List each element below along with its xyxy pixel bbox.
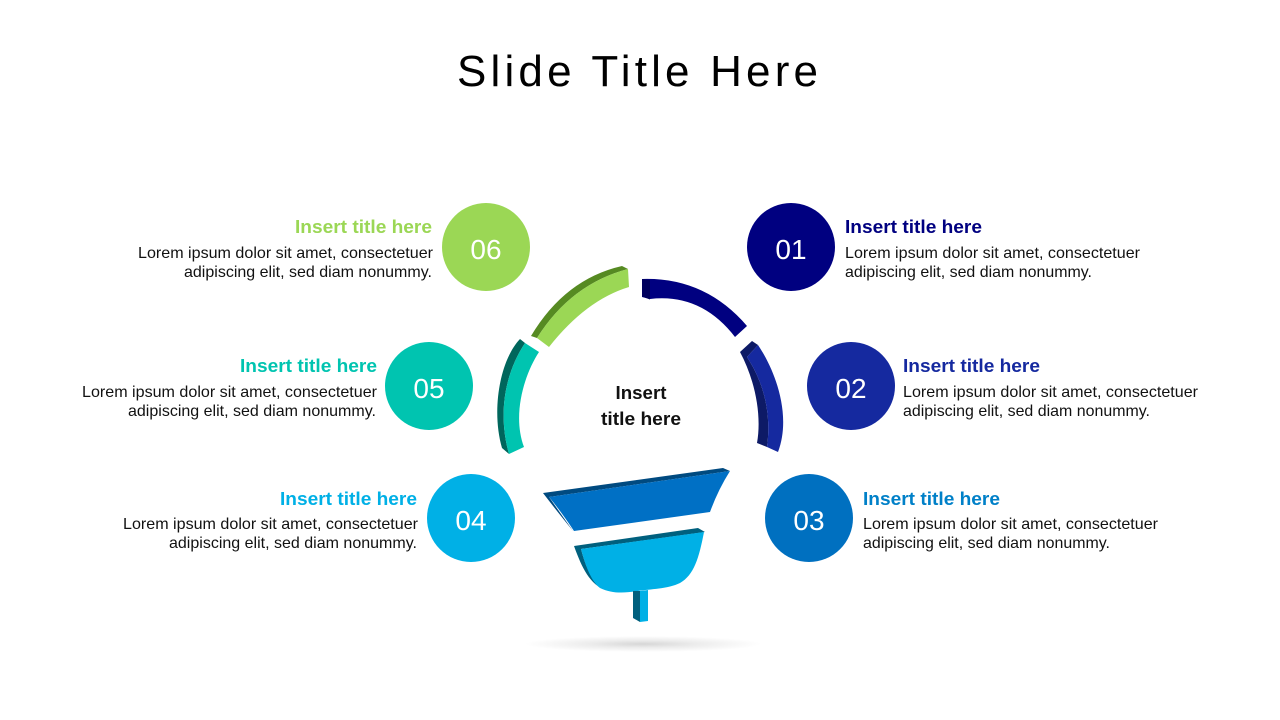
arc segment 05 xyxy=(497,339,539,454)
arc segment 01 xyxy=(642,279,747,337)
text 02: Insert title here xyxy=(903,356,1040,376)
text 03: adipiscing elit, sed diam nonummy. xyxy=(863,535,1110,552)
text 06: adipiscing elit, sed diam nonummy. xyxy=(184,264,432,281)
funnel lower section xyxy=(574,528,705,593)
arc segment 02 xyxy=(740,341,783,452)
text 05: adipiscing elit, sed diam nonummy. xyxy=(128,403,376,420)
item 06 xyxy=(138,203,530,291)
circle 04: 04 xyxy=(455,505,487,536)
text 05 xyxy=(82,356,378,420)
text 06 xyxy=(138,217,434,281)
circle 05: 05 xyxy=(413,373,445,404)
text 04 xyxy=(123,489,419,552)
text 02: adipiscing elit, sed diam nonummy. xyxy=(903,403,1150,420)
circle 02: 02 xyxy=(835,373,867,404)
center label: Insert xyxy=(616,383,666,403)
text 04: Insert title here xyxy=(280,489,417,509)
circle 02 xyxy=(807,342,895,430)
text 01: Lorem ipsum dolor sit amet, consectetuer xyxy=(845,245,1141,262)
text 01 xyxy=(845,217,1141,281)
circle 04 xyxy=(427,474,515,562)
center label: title here xyxy=(601,409,681,429)
text 01: Insert title here xyxy=(845,217,982,237)
item 03 xyxy=(765,474,1159,562)
text 02 xyxy=(903,356,1199,420)
circle 01 xyxy=(747,203,835,291)
circle 06: 06 xyxy=(470,234,502,265)
text 04: adipiscing elit, sed diam nonummy. xyxy=(169,535,417,552)
item 02 xyxy=(807,342,1199,430)
circle 01: 01 xyxy=(775,234,807,265)
text 03 xyxy=(863,489,1159,552)
circle 03: 03 xyxy=(793,505,825,536)
text 02: Lorem ipsum dolor sit amet, consectetuer xyxy=(903,384,1199,401)
circle 06 xyxy=(442,203,530,291)
funnel xyxy=(543,468,730,622)
text 03: Lorem ipsum dolor sit amet, consectetuer xyxy=(863,516,1159,533)
text 04: Lorem ipsum dolor sit amet, consectetuer xyxy=(123,516,419,533)
title: Slide Title Here xyxy=(457,47,818,96)
funnel stem xyxy=(633,590,648,622)
text 05: Lorem ipsum dolor sit amet, consectetuer xyxy=(82,384,378,401)
item 04 xyxy=(123,474,515,562)
circle 05 xyxy=(385,342,473,430)
item 01 xyxy=(747,203,1141,291)
text 01: adipiscing elit, sed diam nonummy. xyxy=(845,264,1092,281)
arc segment 06 xyxy=(531,266,629,347)
text 06: Insert title here xyxy=(295,217,432,237)
text 03: Insert title here xyxy=(863,489,1000,509)
center label xyxy=(601,383,681,429)
text 06: Lorem ipsum dolor sit amet, consectetuer xyxy=(138,245,434,262)
funnel shadow xyxy=(525,636,761,652)
circle 03 xyxy=(765,474,853,562)
item 05 xyxy=(82,342,473,430)
text 05: Insert title here xyxy=(240,356,377,376)
funnel top section xyxy=(543,468,730,531)
